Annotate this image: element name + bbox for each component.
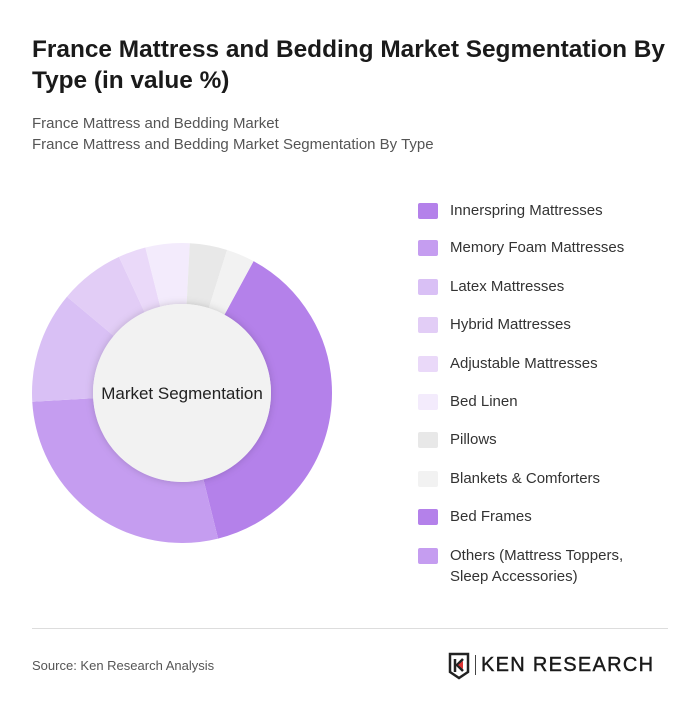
legend: Bed Linen <box>450 393 518 410</box>
legend: Bed Frames <box>450 508 532 525</box>
legend: Hybrid Mattresses <box>450 316 571 333</box>
subtitle: France Mattress and Bedding Market <box>32 115 279 132</box>
logo: KEN RESEARCH <box>481 654 654 676</box>
legend: Innerspring Mattresses <box>450 202 603 219</box>
legend: Adjustable Mattresses <box>450 355 598 372</box>
subtitle <box>32 115 434 153</box>
legend: Others (Mattress Toppers, <box>450 547 623 564</box>
legend: Blankets & Comforters <box>450 470 600 487</box>
legend <box>418 202 624 585</box>
donut chart: Market Segmentation <box>101 384 263 403</box>
source: Source: Ken Research Analysis <box>32 658 214 673</box>
legend: Memory Foam Mattresses <box>450 239 624 256</box>
donut chart <box>32 243 332 543</box>
logo <box>448 652 654 680</box>
legend: Latex Mattresses <box>450 278 564 295</box>
legend: Pillows <box>450 431 497 448</box>
legend: Sleep Accessories) <box>450 568 578 585</box>
title: France Mattress and Bedding Market Segmentation By Type (in value %) <box>32 36 665 94</box>
subtitle: France Mattress and Bedding Market Segmentation By Type <box>32 136 434 153</box>
